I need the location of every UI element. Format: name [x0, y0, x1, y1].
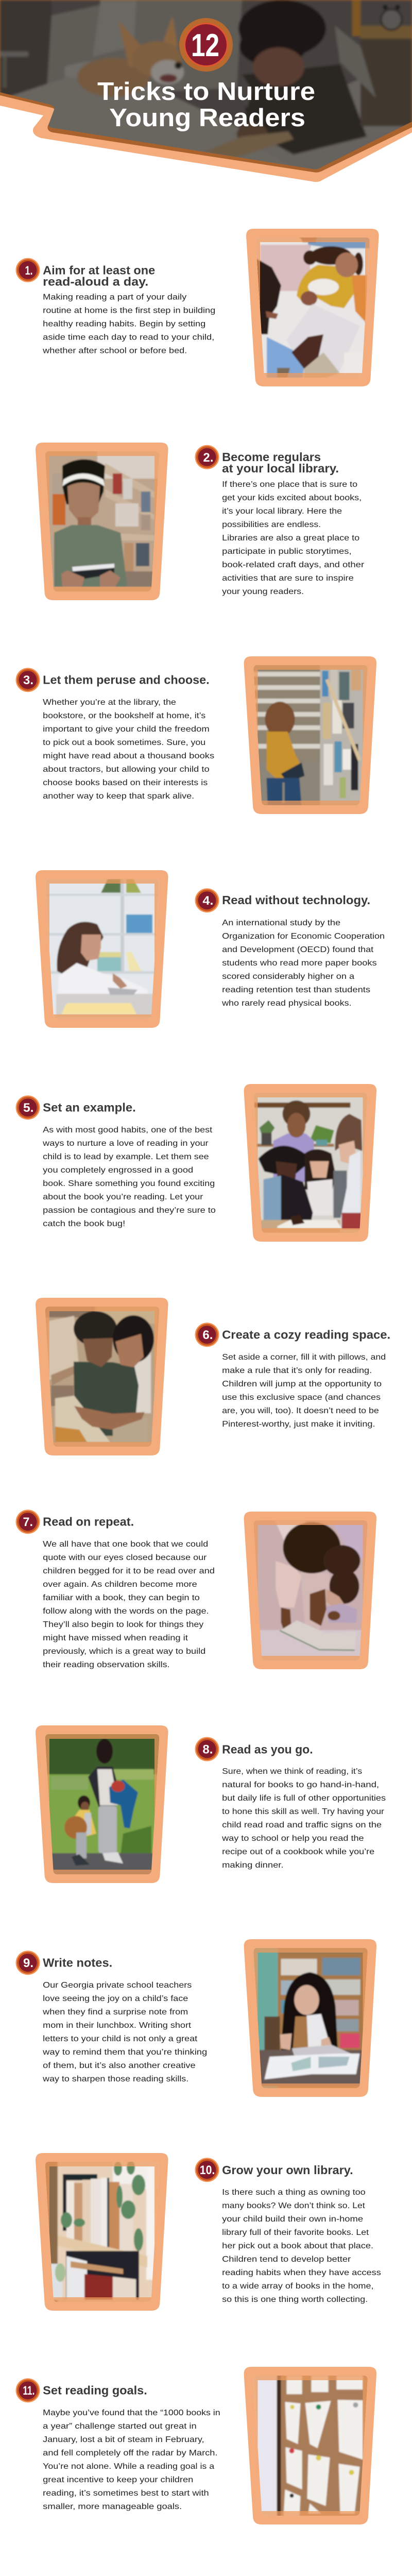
tip 1	[15, 229, 379, 386]
heading 5: Set an example.	[43, 1100, 136, 1114]
body text 7: children begged for it to be read over and	[43, 1567, 215, 1575]
body text 9	[42, 1981, 207, 2083]
body text 7: might have missed when reading it	[43, 1634, 188, 1642]
number badge 11: 11.	[23, 2384, 35, 2398]
body text 7: They’ll also begin to look for things they	[43, 1620, 203, 1629]
heading 10: Grow your own library.	[222, 2163, 353, 2177]
body text 7: quote with our eyes closed because our	[43, 1553, 207, 1562]
number badge 10	[195, 2158, 219, 2182]
body text 2: activities that are sure to inspire	[222, 574, 354, 583]
title: Tricks to Nurture	[97, 78, 315, 106]
body text 8: child read road and traffic signs on the	[222, 1821, 382, 1829]
tip 3	[15, 656, 376, 814]
body text 2: If there’s one place that is sure to	[222, 480, 357, 489]
body text 2: your young readers.	[222, 587, 304, 596]
number badge 6	[195, 1323, 219, 1347]
body text 3: bookstore, or the bookshelf at home, it’s	[43, 711, 205, 720]
tip 2	[36, 443, 365, 600]
heading 2: at your local library.	[222, 462, 339, 475]
body text 9: of them, but it’s also another creative	[43, 2061, 196, 2070]
number badge 2: 2.	[203, 451, 213, 465]
body text 6: are, you will, too). It doesn’t need to be	[222, 1406, 379, 1415]
body text 2: participate in public storytimes,	[222, 547, 352, 556]
number badge 2	[195, 445, 219, 469]
number badge 3: 3.	[23, 673, 33, 687]
body text 1: Making reading a part of your daily	[43, 293, 186, 302]
body text 11: reading, it’s sometimes best to start with	[43, 2489, 209, 2498]
number badge 7: 7.	[23, 1515, 33, 1529]
header banner	[0, 0, 412, 182]
body text 8: way to school or help you read the	[221, 1834, 364, 1843]
body text 9: mom in their lunchbox. Writing short	[43, 2021, 192, 2030]
body text 3: choose books based on their interests is	[43, 778, 208, 787]
heading 4: Read without technology.	[222, 893, 370, 907]
body text 7: familiar with a book, they can begin to	[43, 1594, 200, 1602]
body text 8: natural for books to go hand-in-hand,	[222, 1781, 379, 1789]
tip 9	[15, 1939, 376, 2097]
tip 8	[36, 1725, 386, 1883]
body text 6	[222, 1353, 386, 1429]
body text 8: recipe out of a cookbook while you’re	[222, 1848, 374, 1856]
body text 5: As with most good habits, one of the best	[43, 1126, 213, 1134]
number badge 5: 5.	[23, 1101, 34, 1115]
body text 10: to a wide array of books in the home,	[222, 2282, 374, 2291]
tip 10	[36, 2153, 381, 2311]
heading 3: Let them peruse and choose.	[43, 673, 210, 686]
body text 11: January, lost a bit of steam in February,	[43, 2435, 204, 2444]
heading 7: Read on repeat.	[43, 1515, 134, 1529]
header photo: child reading with dog	[0, 0, 412, 175]
body text 5: catch the book bug!	[43, 1219, 125, 1228]
body text 5: book. Share something you found exciting	[43, 1179, 215, 1188]
photo card: girl studying in front of bookshelf	[244, 1939, 376, 2097]
body text 10: her pick out a book about that place.	[222, 2242, 373, 2250]
number badge 1	[15, 258, 40, 282]
body text 8: making dinner.	[222, 1861, 283, 1870]
photo card: girl browsing bookshelves on stairs	[244, 656, 376, 814]
body text 9: way to remind them that you’re thinking	[42, 2048, 207, 2057]
body text 1: routine at home is the first step in building	[43, 307, 215, 315]
body text 11: and fell completely off the radar by March.	[43, 2449, 217, 2458]
tip 5	[15, 1084, 376, 1242]
photo card: cork board with pinned notes	[244, 2367, 376, 2524]
body text 3: might have read about a thousand books	[43, 752, 214, 760]
body text 10: Is there such a thing as owning too	[222, 2188, 366, 2197]
body text 4: Organization for Economic Cooperation	[222, 932, 385, 941]
heading 2	[222, 450, 339, 475]
body text 8	[221, 1767, 386, 1870]
body text 3	[43, 698, 214, 801]
body text 3: Whether you’re at the library, the	[43, 698, 176, 707]
tip 6	[36, 1298, 390, 1455]
body text 5: you completely engrossed in a good	[43, 1166, 193, 1175]
body text 6: Pinterest-worthy, just make it inviting.	[222, 1420, 375, 1429]
number badge 5	[15, 1095, 40, 1120]
body text 3: about tractors, but allowing your child to	[43, 765, 210, 774]
title: Young Readers	[109, 104, 305, 132]
body text 10: Children tend to develop better	[222, 2255, 351, 2264]
number badge 9	[15, 1951, 40, 1975]
heading 8: Read as you go.	[222, 1742, 313, 1756]
heading 9: Write notes.	[43, 1956, 112, 1969]
photo card: girl reading in library	[36, 443, 168, 600]
number badge 6: 6.	[202, 1328, 213, 1342]
heading 6: Create a cozy reading space.	[222, 1328, 390, 1341]
body text 9: love seeing the joy on a child’s face	[43, 1994, 188, 2003]
body text 11: a year” challenge started out great in	[43, 2422, 197, 2431]
body text 4	[221, 919, 385, 1008]
body text 10: many books? We don’t think so. Let	[222, 2201, 365, 2210]
body text 1: aside time each day to read to your child,	[43, 333, 214, 342]
body text 10: library full of their favorite books. Let	[222, 2228, 369, 2237]
heading 1	[43, 264, 155, 289]
heading 1: read-aloud a day.	[43, 275, 148, 289]
body text 7: We all have that one book that we could	[43, 1540, 208, 1549]
photo card: father and child walking in a park	[36, 1725, 168, 1883]
body text 9: when they find a surprise note from	[42, 2008, 188, 2016]
body text 6: Set aside a corner, fill it with pillows, and	[222, 1353, 386, 1362]
body text 8: to hone this skill as well. Try having your	[222, 1807, 385, 1816]
body text 2: book-related craft days, and other	[222, 561, 365, 569]
body text 8: but daily life is full of other opportunities	[222, 1794, 386, 1803]
body text 4: reading retention test than students	[222, 986, 370, 994]
body text 4: scored considerably higher on a	[222, 972, 354, 981]
tip 4	[36, 870, 385, 1028]
body text 4: who rarely read physical books.	[221, 999, 352, 1008]
body text 1: whether after school or before bed.	[42, 347, 187, 355]
body text 11	[43, 2409, 220, 2511]
photo card: girl with book by white shelves	[36, 870, 168, 1028]
number badge 4	[195, 888, 219, 912]
body text 10: your child build their own in-home	[222, 2215, 363, 2224]
body text 1	[42, 293, 215, 355]
body text 7: follow along with the words on the page.	[43, 1607, 209, 1616]
number badge 4: 4.	[202, 894, 213, 908]
number badge 9: 9.	[23, 1956, 33, 1970]
body text 2: Libraries are also a great place to	[222, 534, 359, 543]
body text 5: child is to lead by example. Let them see	[43, 1153, 209, 1161]
body text 8: Sure, when we think of reading, it’s	[222, 1767, 362, 1776]
body text 11: You’re not alone. While a reading goal is a	[43, 2462, 214, 2471]
body text 11: great incentive to keep your children	[43, 2476, 193, 2484]
body text 2: it’s your local library. Here the	[222, 507, 342, 516]
title	[97, 78, 315, 132]
heading 11: Set reading goals.	[43, 2384, 147, 2397]
body text 3: another way to keep that spark alive.	[43, 792, 194, 801]
heading 2: Become regulars	[222, 450, 321, 464]
body text 1: healthy reading habits. Begin by setting	[43, 320, 205, 329]
body text 10	[222, 2188, 381, 2304]
number badge 10: 10.	[200, 2163, 215, 2177]
body text 10: reading habits when they have access	[222, 2268, 381, 2277]
body text 3: important to give your child the freedom	[43, 725, 210, 734]
number badge 1: 1.	[25, 264, 33, 278]
12 badge	[179, 18, 233, 72]
number badge 7	[15, 1510, 40, 1534]
body text 5	[42, 1126, 216, 1228]
body text 7: previously, which is a great way to build	[43, 1647, 205, 1656]
body text 4: An international study by the	[222, 919, 340, 927]
body text 2	[222, 480, 365, 596]
body text 9: way to sharpen those reading skills.	[42, 2075, 188, 2083]
body text 10: so this is one thing worth collecting.	[222, 2295, 368, 2304]
photo card: father reading to daughter	[246, 229, 379, 386]
body text 6: use this exclusive space (and chances	[222, 1393, 381, 1402]
photo card: teacher and children reading	[244, 1084, 376, 1242]
heading 1: Aim for at least one	[43, 264, 155, 277]
number badge 8: 8.	[202, 1742, 213, 1757]
number badge 11	[15, 2378, 40, 2402]
body text 2: get your kids excited about books,	[222, 494, 362, 502]
body text 11: smaller, more manageable goals.	[43, 2502, 182, 2511]
body text 5: passion be contagious and they’re sure to	[43, 1206, 216, 1215]
number badge 8	[195, 1737, 219, 1761]
header brown border	[0, 0, 412, 173]
body text 9: letters to your child is not only a great	[43, 2035, 198, 2043]
photo card: mother and toddler reading on bed	[244, 1512, 376, 1669]
body text 5: ways to nurture a love of reading in your	[42, 1139, 209, 1148]
body text 7: over again. As children become more	[43, 1580, 197, 1589]
tip 7	[15, 1510, 376, 1669]
body text 2: possibilities are endless.	[222, 520, 321, 529]
body text 5: about the book you’re reading. Let your	[43, 1193, 203, 1201]
body text 4: students who read more paper books	[222, 959, 377, 968]
body text 6: Children will jump at the opportunity to	[222, 1380, 382, 1388]
body text 4: and Development (OECD) found that	[222, 945, 374, 954]
body text 6: make a rule that it’s only for reading.	[222, 1366, 372, 1375]
body text 11: Maybe you’ve found that the “1000 books in	[43, 2409, 220, 2417]
12 badge: 12	[191, 28, 219, 63]
tip 11	[15, 2367, 376, 2524]
photo card: two children sharing a book	[36, 1298, 168, 1455]
photo card: home bookshelf with plants	[36, 2153, 168, 2311]
number badge 3	[15, 668, 40, 692]
body text 7: their reading observation skills.	[43, 1660, 170, 1669]
header peach border	[0, 0, 412, 182]
body text 3: to pick out a book sometimes. Sure, you	[43, 738, 205, 747]
body text 7	[43, 1540, 215, 1669]
body text 9: Our Georgia private school teachers	[43, 1981, 192, 1990]
